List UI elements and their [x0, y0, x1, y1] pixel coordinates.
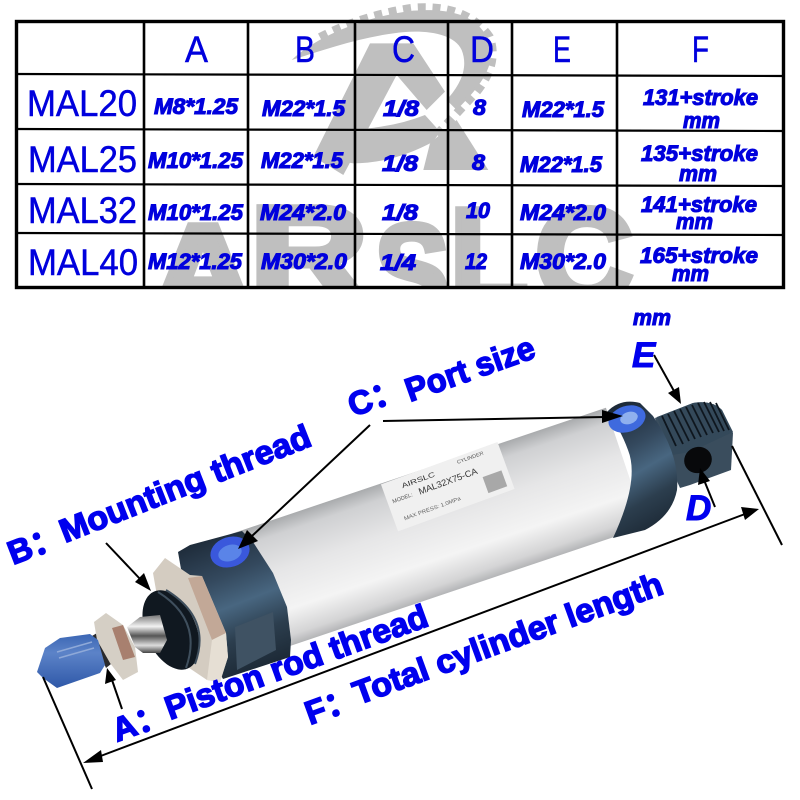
- watermark gear ring: [292, 8, 492, 175]
- watermark wordmark AIRSLC: L: [450, 182, 528, 331]
- row MAL25 values: mm: [679, 161, 717, 186]
- aluminium body: [232, 408, 646, 652]
- table: [15, 21, 785, 288]
- threaded collar: [131, 581, 211, 679]
- column headers: A: [185, 29, 208, 70]
- table grid: [15, 21, 785, 288]
- label C: C：: [343, 369, 409, 424]
- QR code on sticker: [483, 470, 507, 493]
- row MAL40 values: mm: [672, 261, 709, 286]
- row MAL25 values: M22*1.5: [520, 152, 603, 177]
- label C: Port size: [400, 329, 540, 409]
- row MAL32 values: M10*1.25: [148, 200, 244, 225]
- row labels: MAL25: [28, 139, 137, 180]
- column headers: D: [470, 29, 494, 70]
- column headers: C: [392, 29, 415, 70]
- row MAL40 values: M30*2.0: [261, 249, 348, 274]
- small nut: [94, 613, 138, 680]
- row MAL25 values: 135+stroke: [641, 141, 758, 166]
- row MAL20 values: 8: [473, 95, 487, 120]
- row MAL25 values: [148, 141, 758, 186]
- label F: Total cylinder length: [348, 565, 668, 712]
- right extension line: [732, 446, 782, 545]
- row MAL32 values: mm: [676, 209, 713, 234]
- row MAL40 values: 165+stroke: [640, 243, 758, 268]
- row MAL20 values: M22*1.5: [522, 97, 605, 122]
- row labels: MAL40: [28, 242, 138, 283]
- row MAL40 values: M30*2.0: [520, 249, 607, 274]
- left end cap: [178, 531, 291, 679]
- watermark: AIRSLC logo and wordmark: [150, 8, 633, 347]
- arrow D: [698, 468, 715, 507]
- arrows and dimension lines: [43, 355, 782, 789]
- row MAL20 values: M8*1.25: [154, 94, 239, 119]
- label F: F：: [300, 679, 362, 732]
- column headers: E: [553, 29, 571, 70]
- row labels: MAL32: [28, 190, 137, 231]
- port D hole: [680, 442, 716, 478]
- sticker label: CYLINDER: [456, 450, 485, 466]
- blue protective cap: [37, 634, 105, 688]
- sticker label: MAX PRESS: 1.0MPa: [403, 496, 463, 522]
- unit mm: mm: [633, 305, 671, 330]
- watermark wordmark AIRSLC: [162, 204, 634, 286]
- watermark wordmark AIRSLC: A: [150, 198, 256, 347]
- row MAL40 values: [148, 243, 758, 286]
- row MAL32 values: 141+stroke: [641, 192, 757, 217]
- arrow B: [106, 543, 151, 591]
- column headers: F: [692, 29, 709, 70]
- sticker label: MODEL:: [392, 492, 414, 505]
- right port fitting: [605, 401, 649, 437]
- dimension F line: [83, 507, 759, 763]
- label B: Mounting thread: [54, 417, 316, 550]
- row MAL32 values: M24*2.0: [520, 200, 607, 225]
- row MAL32 values: 10: [466, 198, 491, 223]
- label A: Piston rod thread: [160, 597, 433, 727]
- label E: E: [632, 336, 657, 375]
- left extension line: [43, 677, 92, 789]
- row labels: [27, 83, 138, 283]
- arrow C right port: [383, 410, 623, 423]
- label A: A：: [107, 694, 173, 749]
- row MAL40 values: 12: [465, 249, 488, 274]
- watermark wordmark AIRSLC: I: [252, 180, 282, 329]
- row MAL20 values: 1/8: [383, 96, 420, 121]
- row MAL20 values: mm: [683, 108, 720, 133]
- sticker label: MAL32X75-CA: [417, 466, 479, 497]
- row MAL32 values: 1/8: [382, 200, 419, 225]
- row labels: MAL20: [27, 83, 137, 124]
- sticker label: [381, 442, 515, 531]
- row MAL32 values: [148, 192, 757, 234]
- row MAL20 values: M22*1.5: [262, 96, 346, 121]
- row MAL25 values: 1/8: [382, 151, 419, 176]
- right end cap: [607, 402, 677, 538]
- label A: [107, 597, 433, 749]
- callout labels: [2, 305, 711, 749]
- watermark wordmark AIRSLC: R: [250, 180, 368, 329]
- threaded end fitting: [655, 402, 733, 488]
- row MAL40 values: M12*1.25: [148, 249, 243, 274]
- row MAL20 values: [154, 85, 758, 133]
- row MAL25 values: M10*1.25: [148, 148, 244, 173]
- cylinder photo illustration: [37, 401, 733, 688]
- large mounting nut: [153, 558, 228, 682]
- label B: B：: [2, 517, 69, 572]
- arrow E: [654, 355, 681, 404]
- label C: [343, 329, 540, 424]
- row MAL25 values: 8: [472, 150, 486, 175]
- large nut faces: [188, 576, 228, 682]
- arrow A: [105, 668, 122, 709]
- row MAL20 values: 131+stroke: [643, 85, 758, 110]
- piston rod: [127, 615, 167, 653]
- left port fitting: [206, 532, 254, 572]
- row MAL40 values: 1/4: [380, 250, 416, 275]
- watermark wordmark AIRSLC: S: [375, 198, 449, 347]
- label D: D: [686, 489, 711, 528]
- watermark wordmark AIRSLC: C: [535, 182, 633, 331]
- arrow C left port: [238, 425, 370, 549]
- column headers: [185, 29, 709, 70]
- label B: [2, 417, 316, 572]
- flat face on left cap: [235, 612, 276, 670]
- sticker label: AIRSLC: [401, 472, 436, 490]
- thread stub behind cap: [92, 630, 116, 668]
- row MAL32 values: M24*2.0: [260, 200, 347, 225]
- row MAL25 values: M22*1.5: [261, 148, 344, 173]
- column headers: B: [295, 29, 315, 70]
